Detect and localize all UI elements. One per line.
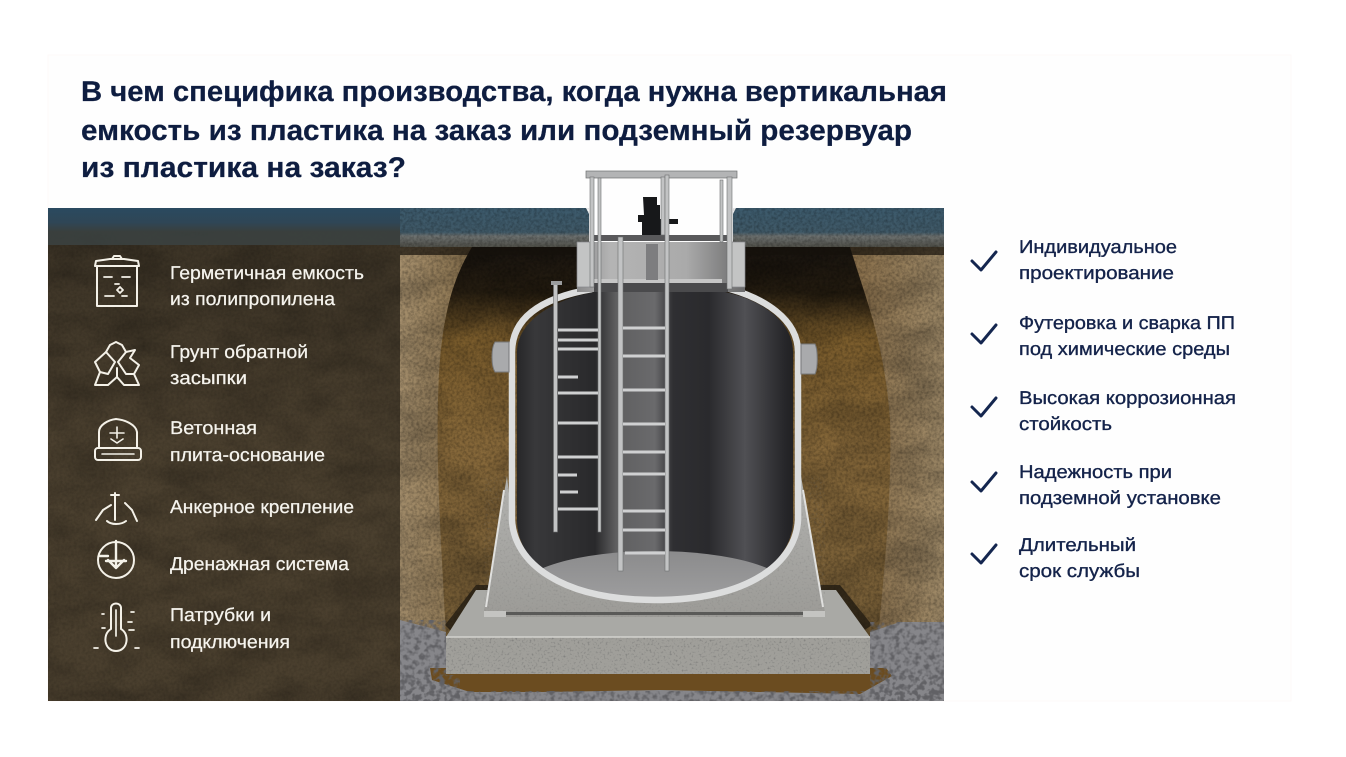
item: backfill soil: Грунт обратной	[170, 341, 308, 362]
item: nozzles: подключения	[170, 631, 290, 652]
benefit: service life: Длительный	[1019, 534, 1136, 555]
benefit: corrosion resistance: Высокая коррозионная	[1019, 387, 1236, 408]
benefit: individual design: проектирование	[1019, 262, 1174, 283]
item: backfill soil	[95, 341, 308, 388]
benefit: reliability: Надежность при	[1019, 461, 1172, 482]
benefit: individual design: Индивидуальное	[1019, 236, 1177, 257]
icon: check	[972, 545, 996, 563]
title: из пластика на заказ?	[81, 152, 406, 184]
item: drainage: Дренажная система	[170, 553, 350, 574]
benefit: reliability	[972, 461, 1221, 508]
benefit: reliability: подземной установке	[1019, 487, 1221, 508]
item: nozzles: Патрубки и	[170, 604, 271, 625]
item: concrete base	[95, 417, 325, 465]
tank shell	[512, 289, 798, 600]
page background panel	[48, 55, 1291, 701]
side ladder	[551, 281, 598, 532]
item: concrete base: плита-основание	[170, 444, 325, 465]
item: sealed tank: из полипропилена	[170, 288, 336, 309]
icon: soil	[95, 342, 139, 385]
benefit: lining and welding: под химические среды	[1019, 338, 1230, 359]
icon: check	[972, 398, 996, 416]
tank floor	[543, 551, 767, 597]
right nozzle	[801, 344, 817, 374]
benefit: service life: срок службы	[1019, 560, 1140, 581]
benefit: corrosion resistance: стойкость	[1019, 413, 1112, 434]
icon: anchor	[96, 493, 137, 524]
concrete saddle support	[484, 476, 825, 617]
benefit: individual design	[972, 236, 1177, 283]
surface slabs	[400, 208, 944, 247]
soil outer walls	[400, 247, 944, 636]
gravel bed	[400, 620, 944, 701]
tank interior	[517, 292, 793, 596]
item: drainage	[98, 541, 350, 578]
concrete base slab	[446, 590, 870, 674]
icon: tank	[95, 256, 139, 306]
item: concrete base: Ветонная	[170, 417, 257, 438]
panel: components list	[48, 208, 400, 701]
title: емкость из пластика на заказ или подземный резервуар	[81, 115, 912, 147]
icon: base plate	[95, 419, 141, 460]
pump	[638, 197, 678, 235]
icon: thermometer	[94, 604, 139, 651]
benefit: corrosion resistance	[972, 387, 1236, 434]
title: В чем специфика производства, когда нужна вертикальная	[81, 76, 947, 108]
item: backfill soil: засыпки	[170, 367, 247, 388]
underground tank cross-section illustration	[400, 171, 944, 701]
icon: drain	[98, 541, 134, 578]
benefit: service life	[972, 534, 1140, 581]
title	[81, 76, 947, 184]
access neck	[577, 235, 745, 292]
benefit: lining and welding: Футеровка и сварка ПП	[1019, 312, 1235, 333]
item: sealed tank	[95, 256, 364, 309]
item: anchoring	[96, 493, 354, 524]
main ladder	[618, 175, 669, 571]
icon: check	[972, 252, 996, 270]
icon: check	[972, 325, 996, 343]
item: anchoring: Анкерное крепление	[170, 496, 354, 517]
icon: check	[972, 473, 996, 491]
benefit: lining and welding	[972, 312, 1235, 359]
item: nozzles	[94, 604, 290, 652]
guard rail frame	[586, 171, 737, 532]
item: sealed tank: Герметичная емкость	[170, 262, 364, 283]
panel: benefits list	[972, 236, 1236, 581]
left nozzle	[492, 342, 509, 372]
